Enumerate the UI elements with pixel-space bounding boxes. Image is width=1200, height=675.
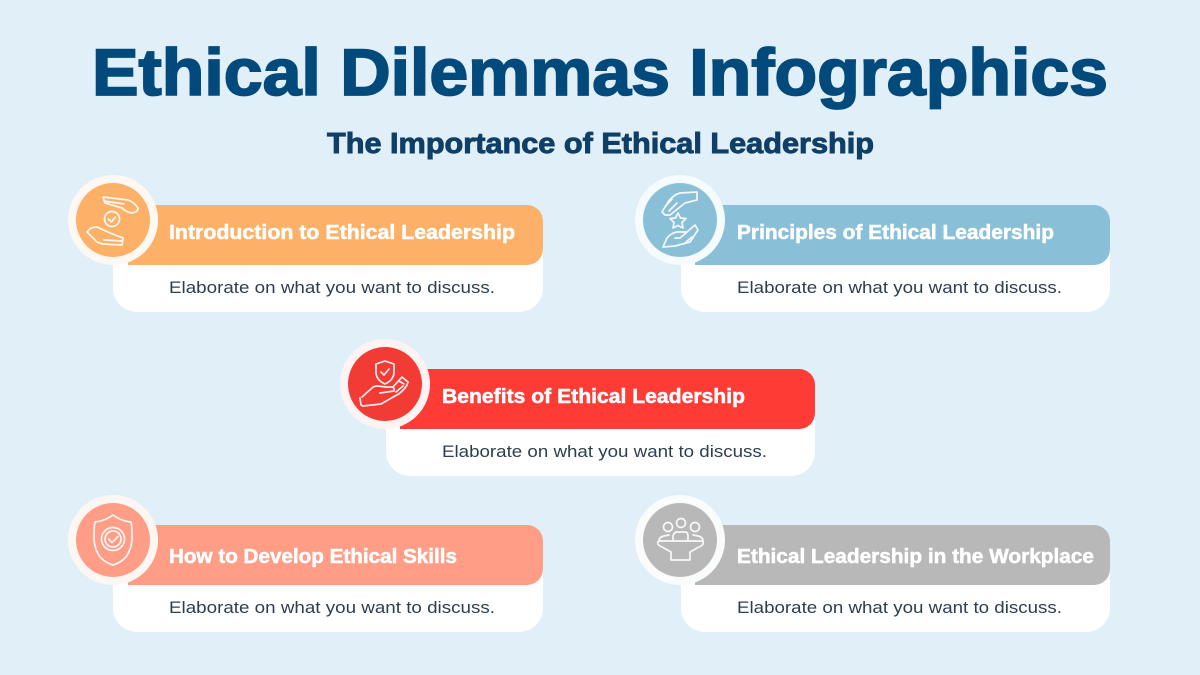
- header bar: [695, 525, 1110, 585]
- title: Ethical Dilemmas Infographics: [92, 35, 1108, 109]
- body text: Elaborate on what you want to discuss.: [442, 442, 767, 461]
- card body: [113, 525, 543, 632]
- header text: How to Develop Ethical Skills: [169, 546, 457, 568]
- body text: Elaborate on what you want to discuss.: [169, 278, 495, 297]
- body text: Elaborate on what you want to discuss.: [737, 278, 1062, 297]
- header bar: [128, 205, 543, 265]
- subtitle: The Importance of Ethical Leadership: [327, 128, 874, 160]
- icon badge: people around a table: [635, 495, 725, 585]
- icon badge: hand with shield: [340, 339, 430, 429]
- icon badge: hands with check: [68, 175, 158, 265]
- icon badge: shield with check: [68, 495, 158, 585]
- header text: Ethical Leadership in the Workplace: [737, 546, 1094, 568]
- panel: introduction to ethical leadership: [68, 175, 543, 312]
- header text: Principles of Ethical Leadership: [737, 222, 1054, 244]
- card body: [113, 205, 543, 312]
- panel: principles of ethical leadership: [635, 175, 1110, 312]
- header bar: [128, 525, 543, 585]
- card body: [386, 369, 815, 476]
- panel: how to develop ethical skills: [68, 495, 543, 632]
- body text: Elaborate on what you want to discuss.: [169, 598, 495, 617]
- card body: [681, 205, 1110, 312]
- panel: ethical leadership in the workplace: [635, 495, 1110, 632]
- header text: Benefits of Ethical Leadership: [442, 386, 745, 408]
- header bar: [400, 369, 815, 429]
- header text: Introduction to Ethical Leadership: [169, 222, 515, 244]
- icon badge: hands with star: [635, 175, 725, 265]
- card body: [681, 525, 1110, 632]
- body text: Elaborate on what you want to discuss.: [737, 598, 1062, 617]
- panel: benefits of ethical leadership: [340, 339, 815, 476]
- header bar: [695, 205, 1110, 265]
